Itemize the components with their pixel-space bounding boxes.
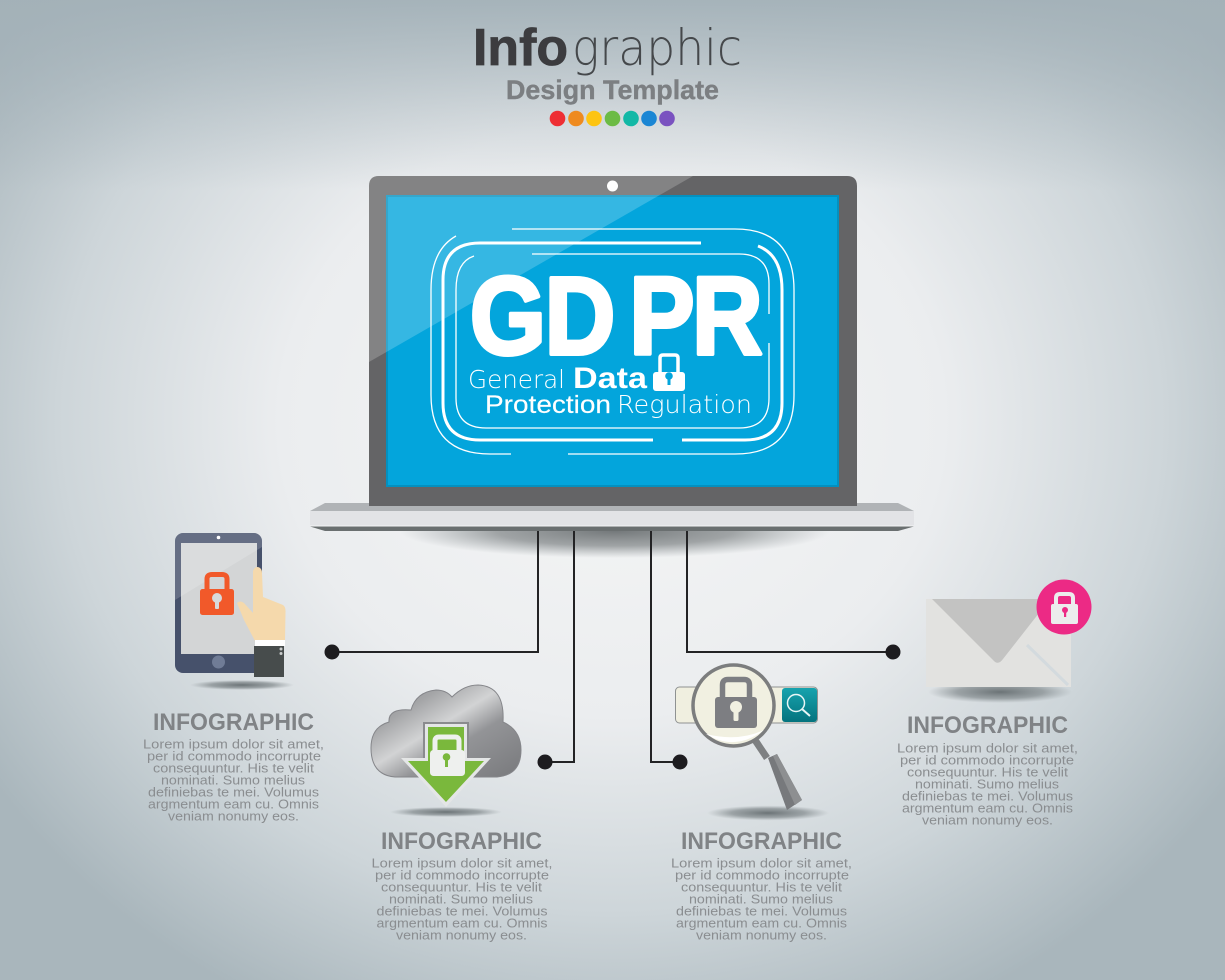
arrow outer border <box>401 722 491 807</box>
tablet shadow <box>190 680 294 690</box>
shirt cuff <box>255 640 285 646</box>
title: Info <box>473 19 568 77</box>
GDPR frame lines <box>431 229 794 454</box>
magnifier shadow <box>707 806 829 820</box>
icon: tablet with hand <box>175 533 294 690</box>
text block: bottom left: consequuntur. His te velit <box>381 880 542 894</box>
text block: bottom left: definiebas te mei. Volumus <box>376 904 548 918</box>
text block: bottom right: per id commodo incorrupte <box>675 868 849 882</box>
text block: left: INFOGRAPHIC <box>153 709 314 736</box>
text block: right: nominati. Sumo melius <box>915 776 1060 792</box>
GDPR subtitle: Data <box>573 362 647 395</box>
text block: bottom right: INFOGRAPHIC <box>681 828 842 855</box>
connector lines <box>332 531 893 762</box>
laptop screen <box>386 195 839 487</box>
laptop lid <box>369 176 857 506</box>
text block: right: veniam nonumy eos. <box>922 812 1053 828</box>
GDPR heading: GDPR <box>470 256 763 378</box>
icon: GDPR lock <box>653 355 685 391</box>
text block: right <box>897 712 1078 828</box>
colour dots <box>550 111 675 126</box>
text block: bottom left: Lorem ipsum dolor sit amet, <box>372 856 552 870</box>
text block: left <box>143 709 324 824</box>
gray lock <box>722 680 750 704</box>
GDPR subtitle: Protection <box>485 391 611 419</box>
text block: left: Lorem ipsum dolor sit amet, <box>143 736 324 752</box>
white lock <box>435 737 459 756</box>
text block: right: consequuntur. His te velit <box>907 764 1068 780</box>
text block: right: INFOGRAPHIC <box>907 712 1068 739</box>
text block: left: nominati. Sumo melius <box>161 772 306 788</box>
text block: left: definiebas te mei. Volumus <box>148 784 320 800</box>
icon: cloud download <box>371 685 521 817</box>
green arrow <box>408 727 484 802</box>
connector dots <box>324 644 900 770</box>
hand <box>237 567 286 641</box>
laptop base <box>310 503 914 511</box>
jacket sleeve <box>254 646 284 677</box>
text block: bottom left: veniam nonumy eos. <box>396 928 527 942</box>
cloud shadow <box>390 807 502 817</box>
text block: bottom left: argmentum eam cu. Omnis <box>376 916 548 930</box>
text block: bottom left: nominati. Sumo melius <box>389 892 534 906</box>
text block: bottom right <box>671 828 852 942</box>
text block: bottom right: argmentum eam cu. Omnis <box>676 916 848 930</box>
tablet body <box>175 533 262 673</box>
text block: bottom right: veniam nonumy eos. <box>696 928 827 942</box>
pink badge <box>1036 580 1092 634</box>
envelope shadow <box>928 681 1072 703</box>
white lock <box>1056 594 1073 607</box>
text block: right: Lorem ipsum dolor sit amet, <box>897 740 1078 756</box>
text block: bottom right: nominati. Sumo melius <box>689 892 834 906</box>
text block: left: argmentum eam cu. Omnis <box>148 796 320 812</box>
magnifier lens <box>693 665 774 746</box>
screen reflection <box>369 176 693 362</box>
text block: bottom right: Lorem ipsum dolor sit amet, <box>671 856 852 870</box>
GDPR subtitle <box>468 362 752 419</box>
title: Design Template <box>506 75 719 105</box>
orange lock <box>207 574 227 592</box>
text block: bottom left: INFOGRAPHIC <box>381 828 542 855</box>
camera <box>607 180 618 192</box>
icon: magnifier search <box>676 665 829 820</box>
search bar <box>676 687 818 723</box>
envelope body <box>926 599 1071 687</box>
cloud <box>371 685 521 777</box>
icon: locked envelope <box>926 580 1092 703</box>
search button <box>782 688 817 722</box>
text block: right: per id commodo incorrupte <box>900 752 1074 768</box>
laptop <box>310 176 914 558</box>
title: graphic <box>572 19 742 77</box>
laptop shelf shadow <box>400 504 830 558</box>
envelope flap <box>932 599 1050 663</box>
GDPR subtitle: Regulation <box>617 390 752 419</box>
text block: left: per id commodo incorrupte <box>147 748 321 764</box>
text block: right: definiebas te mei. Volumus <box>902 788 1074 804</box>
text block: bottom left: per id commodo incorrupte <box>375 868 549 882</box>
text block: left: consequuntur. His te velit <box>153 760 314 776</box>
text block: bottom right: consequuntur. His te velit <box>681 880 842 894</box>
title <box>473 19 742 105</box>
text block: right: argmentum eam cu. Omnis <box>902 800 1074 816</box>
text block: left: veniam nonumy eos. <box>168 808 299 824</box>
GDPR subtitle: General <box>468 365 565 394</box>
text block: bottom left <box>372 828 552 942</box>
magnifier handle <box>755 740 767 758</box>
text block: bottom right: definiebas te mei. Volumus <box>676 904 848 918</box>
